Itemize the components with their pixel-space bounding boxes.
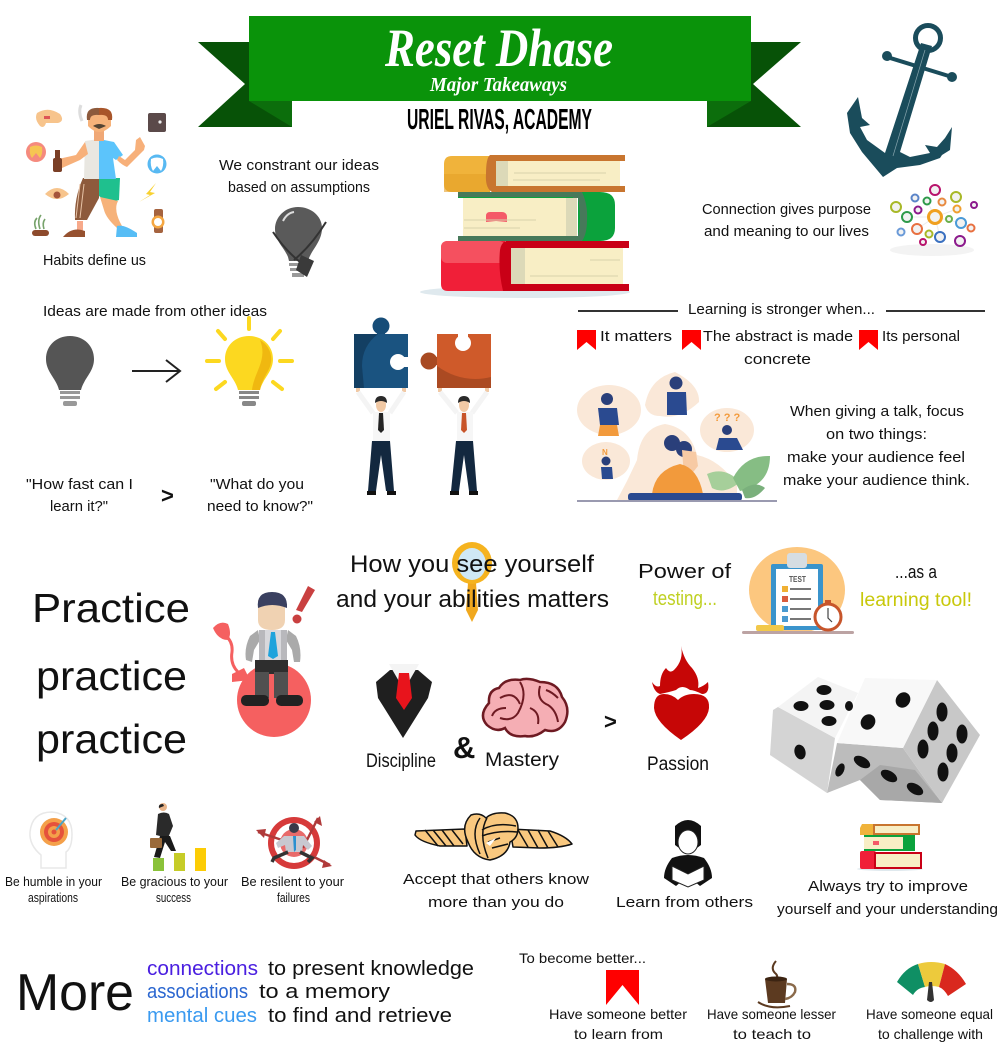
text: humble: aspirations <box>28 890 78 905</box>
subtitle: academy name: URIEL RIVAS, ACADEMY <box>407 104 592 136</box>
icon: crowd of people <box>890 185 977 256</box>
text: resilient: failures <box>277 890 310 905</box>
label: discipline: Discipline <box>366 751 436 772</box>
text: humble: Be humble in your <box>5 874 103 889</box>
icon: dice <box>770 677 980 803</box>
icon: head with target <box>30 812 72 868</box>
text: power of testing: Power of <box>638 561 732 583</box>
text: connections list <box>147 958 474 1027</box>
text: someone equal: Have someone equal <box>866 1006 993 1022</box>
icon: coffee cup <box>758 961 795 1007</box>
list: learning conditions: Its personal <box>882 328 960 345</box>
title banner <box>198 16 801 127</box>
icon: stack of books <box>420 155 630 298</box>
icon: test clipboard and stopwatch: TEST <box>789 575 806 584</box>
text: what to know <box>207 476 313 515</box>
text: connections list: to find and retrieve <box>268 1005 452 1027</box>
text: someone better <box>549 1006 687 1042</box>
icon: person reading <box>664 820 712 887</box>
text: connection: Connection gives purpose <box>702 201 871 218</box>
text: constraint <box>219 157 379 196</box>
text: someone lesser: to teach to <box>733 1026 811 1042</box>
icon: mirror <box>452 542 492 622</box>
illustration: men holding puzzle pieces <box>354 318 491 495</box>
icon: man climbing steps <box>150 803 206 871</box>
list: learning conditions: concrete <box>744 351 811 368</box>
label: mastery: Mastery <box>485 750 560 771</box>
text: accept others: Accept that others know <box>403 871 589 888</box>
text: giving a talk: make your audience feel <box>787 449 965 466</box>
heading: practice: practice <box>36 716 187 762</box>
text: constraint: based on assumptions <box>228 179 370 196</box>
text: how you see yourself: How you see yourself <box>350 551 594 578</box>
text: connections list: connections <box>147 958 258 980</box>
icon: small books <box>857 824 923 871</box>
text: someone lesser <box>707 1006 836 1042</box>
text: always improve <box>777 878 998 918</box>
text: learning tool <box>860 562 972 611</box>
text: constraint: We constrant our ideas <box>219 157 379 174</box>
heading: practice: Practice <box>32 585 190 631</box>
icon: flaming heart <box>652 646 709 740</box>
illustration: audience thoughts <box>577 372 777 502</box>
text: accept others <box>403 871 589 911</box>
text: what to know: "What do you <box>210 476 304 493</box>
text: how fast: learn it?" <box>50 498 108 515</box>
text: always improve: yourself and your understanding <box>777 901 998 918</box>
text: resilient <box>241 874 345 905</box>
text: connection <box>702 201 871 240</box>
icon: lit bulb <box>207 318 292 406</box>
text: connection: and meaning to our lives <box>704 223 869 240</box>
title banner: Major Takeaways <box>429 74 567 96</box>
text: giving a talk: When giving a talk, focus <box>790 403 964 420</box>
list: learning conditions: It matters <box>600 328 672 345</box>
text: learning tool: learning tool! <box>860 590 972 611</box>
text: someone lesser: Have someone lesser <box>707 1006 836 1022</box>
text: gracious: Be gracious to your <box>121 874 229 889</box>
icon: habits figure <box>26 105 166 237</box>
text: to become better: To become better... <box>519 950 646 966</box>
icon: red bookmark <box>606 970 639 1005</box>
text: power of testing: testing... <box>653 588 717 610</box>
text: ideas from ideas: Ideas are made from other ideas <box>43 303 267 320</box>
heading: practice: practice <box>36 653 187 699</box>
text: connections list: mental cues <box>147 1005 257 1027</box>
icon: test clipboard and stopwatch <box>742 547 854 634</box>
icon: rope knot <box>415 813 572 860</box>
symbol: ampersand: & <box>453 730 475 765</box>
icon: man on red ball <box>213 586 315 737</box>
illustration: audience thoughts: ? ? ? <box>714 412 741 424</box>
text: connections list: to a memory <box>259 981 390 1003</box>
text: how fast: "How fast can I <box>26 476 133 493</box>
text: someone better: to learn from <box>574 1026 663 1042</box>
text: gracious <box>121 874 229 905</box>
text: what to know: need to know?" <box>207 498 313 515</box>
text: accept others: more than you do <box>428 894 564 911</box>
text: resilient: Be resilent to your <box>241 874 345 889</box>
text: humble <box>5 874 103 905</box>
text: someone equal: to challenge with <box>878 1026 983 1042</box>
heading: learning is stronger: Learning is stronger when... <box>688 301 875 318</box>
text: how fast <box>26 476 133 515</box>
icon: target with running man <box>256 816 332 869</box>
title banner: Reset Dhase <box>384 18 613 78</box>
text: giving a talk: on two things: <box>826 426 927 443</box>
illustration: audience thoughts: N <box>602 448 608 457</box>
text: power of testing <box>638 561 732 610</box>
text: always improve: Always try to improve <box>808 878 968 895</box>
arrow <box>132 360 180 382</box>
list: learning conditions: The abstract is made <box>703 328 853 345</box>
text: someone better: Have someone better <box>549 1006 687 1022</box>
symbol: greater than: > <box>604 709 617 734</box>
text: learning tool: ...as a <box>895 562 938 582</box>
heading: more: More <box>16 964 134 1022</box>
icon: chained light bulb <box>273 207 326 277</box>
text: someone equal <box>866 1006 993 1042</box>
text: giving a talk <box>783 403 970 489</box>
label: habits: Habits define us <box>43 252 146 269</box>
text: gracious: success <box>156 890 191 905</box>
icon: suit and tie <box>376 664 432 738</box>
text: how you see yourself: and your abilities matters <box>336 586 609 613</box>
heading: practice <box>32 585 190 762</box>
icon: gauge <box>897 962 966 1002</box>
text: learn from others: Learn from others <box>616 894 753 911</box>
text: giving a talk: make your audience think. <box>783 472 970 489</box>
symbol: greater than: > <box>161 483 174 508</box>
list: learning conditions <box>577 328 960 368</box>
text: connections list: associations <box>147 981 248 1003</box>
label: passion: Passion <box>647 754 709 775</box>
text: how you see yourself <box>336 542 609 622</box>
icon: anchor <box>847 26 957 177</box>
text: connections list: to present knowledge <box>268 958 474 980</box>
icon: brain <box>483 679 567 736</box>
icon: dark bulb <box>46 336 94 406</box>
